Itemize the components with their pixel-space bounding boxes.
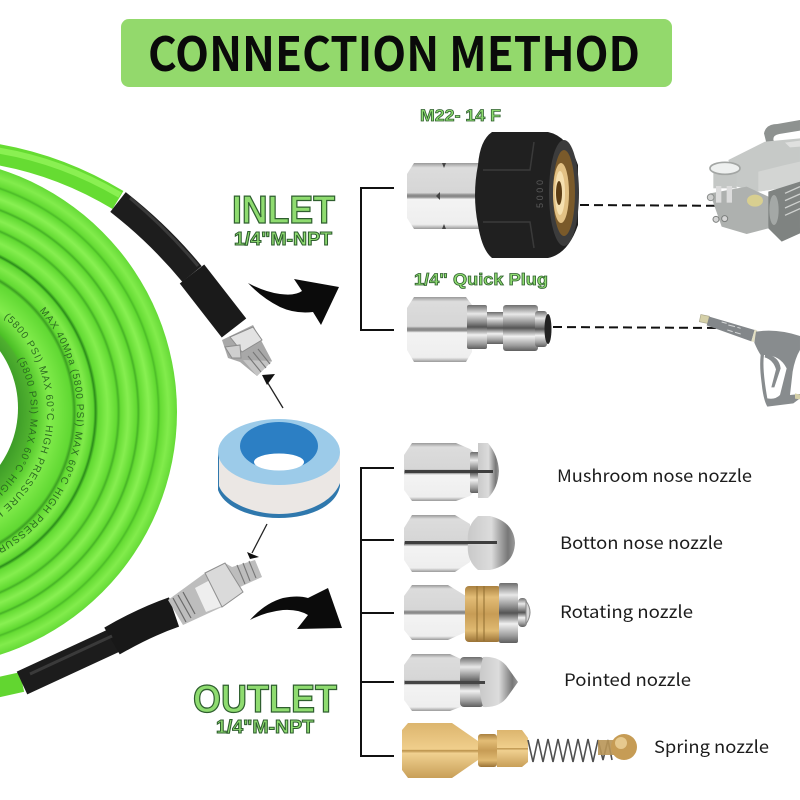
button nose nozzle	[404, 515, 515, 572]
label: mushroom nozzle: Mushroom nose nozzle	[557, 462, 752, 487]
outlet hose end with black sleeve	[0, 560, 262, 688]
coupler pressure marking: 5000	[535, 180, 545, 208]
curved arrow: inlet	[248, 279, 339, 325]
rotating nozzle	[404, 583, 530, 643]
label: M22 14 F: M22- 14 F	[420, 106, 501, 125]
inlet hose end with black sleeve	[0, 150, 272, 376]
label: quick plug: 1/4" Quick Plug	[414, 270, 548, 289]
label: spring nozzle: Spring nozzle	[654, 733, 769, 758]
quick plug	[407, 297, 552, 362]
pressure washer machine icon	[707, 120, 800, 242]
label: pointed nozzle: Pointed nozzle	[564, 666, 691, 691]
small arrow: tape to outlet thread	[247, 524, 267, 559]
inlet heading: 1/4"M-NPT	[234, 229, 332, 249]
nozzle bracket	[361, 468, 394, 756]
inlet heading	[232, 189, 335, 249]
outlet heading	[193, 678, 337, 737]
outlet heading: OUTLET	[193, 678, 337, 721]
label: rotating nozzle: Rotating nozzle	[560, 598, 693, 623]
inlet heading: INLET	[232, 189, 335, 232]
green hose coil	[0, 169, 177, 655]
spray gun icon	[699, 315, 800, 407]
outlet threaded fitting	[168, 560, 262, 625]
thread seal tape roll	[218, 419, 340, 518]
spring nozzle	[402, 723, 637, 778]
small arrow: tape to inlet thread	[262, 374, 283, 408]
title banner: CONNECTION METHOD	[148, 16, 640, 85]
curved arrow: outlet	[250, 588, 342, 629]
dashed link: coupler to pressure washer	[580, 205, 752, 206]
pointed nozzle	[404, 654, 518, 711]
inlet bracket	[361, 188, 394, 330]
label: button nose nozzle: Botton nose nozzle	[560, 529, 723, 554]
mushroom nozzle	[404, 443, 499, 501]
outlet heading: 1/4"M-NPT	[216, 717, 314, 737]
M22 coupler	[407, 132, 579, 258]
dashed link: plug to spray gun	[553, 327, 725, 328]
inlet threaded fitting	[222, 325, 272, 376]
